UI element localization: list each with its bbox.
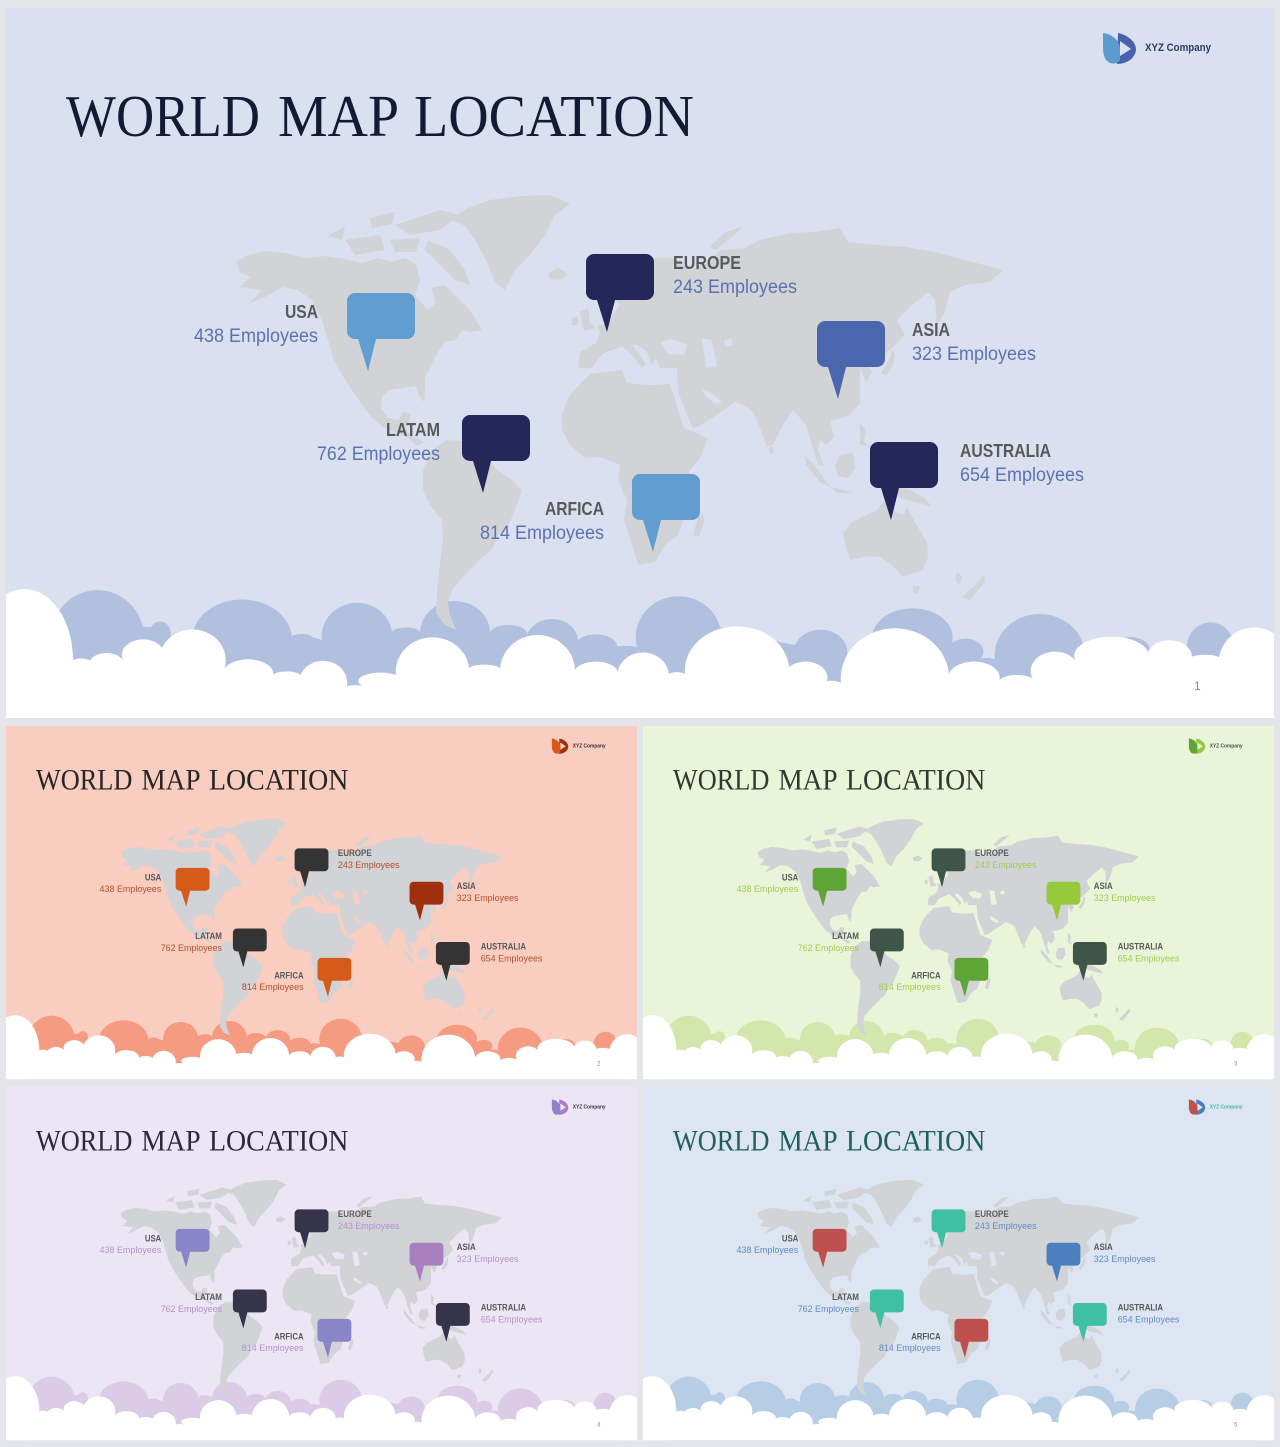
title: WORLD [36, 765, 132, 797]
callout: Asia: ASIA [457, 1242, 476, 1252]
logo [1189, 738, 1243, 754]
callout: Australia [436, 1302, 543, 1342]
logo [1103, 33, 1212, 64]
callout: Asia: 323 Employees [457, 1254, 519, 1265]
callout: Europe: 243 Employees [975, 860, 1037, 871]
callout: USA: USA [145, 1233, 162, 1243]
callout: Asia: 323 Employees [912, 344, 1036, 365]
panel: purple slide [0, 1087, 645, 1441]
back clouds [665, 1377, 1257, 1441]
callout: Europe: 243 Employees [338, 1221, 400, 1232]
page number: 5 [1234, 1422, 1238, 1428]
page number: 1 [1194, 679, 1201, 693]
callout: Asia: ASIA [457, 881, 476, 891]
front clouds [0, 1015, 645, 1080]
title: LOCATION [414, 83, 694, 149]
back clouds [665, 1016, 1257, 1080]
callout: Africa: 814 Employees [242, 982, 304, 993]
world map [236, 195, 1003, 630]
callout: Europe: 243 Employees [338, 860, 400, 871]
title: MAP [141, 1126, 201, 1158]
callout: Europe: EUROPE [673, 253, 741, 273]
title: LOCATION [846, 1126, 985, 1158]
logo: XYZ Company [1145, 42, 1212, 54]
callout: Latam: LATAM [195, 931, 222, 941]
front clouds [628, 1376, 1280, 1441]
callout: USA: 438 Employees [100, 884, 162, 895]
callout: Europe: EUROPE [975, 848, 1009, 858]
callout: Latam: 762 Employees [161, 1304, 222, 1315]
callout: Africa [879, 958, 988, 997]
callout: USA [737, 1229, 847, 1268]
title: LOCATION [209, 765, 348, 797]
callout: Asia: 323 Employees [1094, 893, 1156, 904]
callout: Africa: 814 Employees [242, 1343, 304, 1354]
callout: USA [100, 1229, 210, 1268]
slide background [6, 726, 637, 1079]
callout: Africa [879, 1319, 988, 1358]
title: LOCATION [846, 765, 985, 797]
callout: USA: 438 Employees [737, 1245, 799, 1256]
callout: Asia: ASIA [912, 320, 950, 340]
panel: pale blue slide [628, 1087, 1280, 1441]
world map [757, 1180, 1139, 1397]
callout: USA: 438 Employees [737, 884, 799, 895]
callout: USA: 438 Employees [100, 1245, 162, 1256]
callout: USA: USA [782, 872, 799, 882]
title: LOCATION [209, 1126, 348, 1158]
callout: Australia: AUSTRALIA [1118, 1302, 1163, 1312]
callout: Asia: 323 Employees [1094, 1254, 1156, 1265]
callout: Africa [242, 1319, 351, 1358]
callout: Australia: AUSTRALIA [1118, 941, 1163, 951]
callout: Europe: 243 Employees [673, 277, 797, 298]
callout: Africa: ARFICA [545, 499, 604, 519]
back clouds [28, 1016, 620, 1080]
callout: USA [194, 293, 415, 371]
front clouds [0, 589, 1280, 720]
callout: Australia: 654 Employees [1118, 1314, 1180, 1325]
callout: Latam: 762 Employees [798, 1304, 859, 1315]
callout: Latam: 762 Employees [317, 444, 440, 465]
panel: orange slide [0, 726, 645, 1080]
callout: Europe [586, 253, 797, 332]
callout: USA [737, 868, 847, 907]
callout: Africa: 814 Employees [480, 523, 604, 544]
callout: Europe: 243 Employees [975, 1221, 1037, 1232]
callout: Latam [798, 1290, 904, 1328]
page number: 2 [597, 1061, 601, 1067]
page number: 3 [1234, 1061, 1238, 1067]
back clouds [60, 590, 1232, 686]
callout: Asia [1047, 881, 1156, 921]
slide background [643, 1087, 1274, 1440]
callout: Africa: ARFICA [274, 970, 304, 980]
title: WORLD [673, 765, 769, 797]
world map [120, 1180, 502, 1397]
world map [120, 819, 502, 1036]
slide background [6, 8, 1274, 718]
callout: Africa [480, 474, 700, 552]
callout: Australia [1073, 941, 1180, 981]
front clouds [628, 1015, 1280, 1080]
logo [552, 738, 606, 754]
panel: main blue slide [0, 8, 1280, 720]
callout: Europe: EUROPE [338, 1209, 372, 1219]
callout: Europe [295, 848, 400, 887]
world map [757, 819, 1139, 1036]
callout: Africa: ARFICA [911, 1331, 941, 1341]
logo: XYZ Company [1210, 1104, 1243, 1110]
title: MAP [278, 83, 397, 149]
callout: USA: 438 Employees [194, 326, 318, 347]
title: MAP [778, 1126, 838, 1158]
callout: Latam: 762 Employees [161, 943, 222, 954]
callout: Latam: LATAM [832, 931, 859, 941]
callout: Australia: AUSTRALIA [481, 1302, 526, 1312]
callout: Europe [295, 1209, 400, 1248]
callout: Asia [817, 320, 1036, 399]
callout: Europe: EUROPE [975, 1209, 1009, 1219]
callout: Latam: LATAM [832, 1292, 859, 1302]
callout: Latam: LATAM [195, 1292, 222, 1302]
logo: XYZ Company [573, 1104, 606, 1110]
callout: Australia: 654 Employees [960, 465, 1084, 486]
callout: Latam [161, 929, 267, 967]
callout: Africa: 814 Employees [879, 1343, 941, 1354]
title: WORLD [673, 1126, 769, 1158]
callout: Latam [798, 929, 904, 967]
slide background [6, 1087, 637, 1440]
page number: 4 [597, 1422, 601, 1428]
callout: Africa: ARFICA [911, 970, 941, 980]
callout: Australia: AUSTRALIA [481, 941, 526, 951]
callout: Asia [410, 1242, 519, 1282]
callout: Asia: ASIA [1094, 881, 1113, 891]
callout: USA: USA [782, 1233, 799, 1243]
callout: USA [100, 868, 210, 907]
title: WORLD [66, 83, 260, 149]
callout: Asia [410, 881, 519, 921]
logo: XYZ Company [573, 743, 606, 749]
callout: USA: USA [285, 302, 318, 322]
callout: Australia: 654 Employees [481, 953, 543, 964]
callout: Europe: EUROPE [338, 848, 372, 858]
callout: Australia [436, 941, 543, 981]
title: MAP [141, 765, 201, 797]
callout: Latam: 762 Employees [798, 943, 859, 954]
callout: USA: USA [145, 872, 162, 882]
callout: Africa: ARFICA [274, 1331, 304, 1341]
title: MAP [778, 765, 838, 797]
callout: Latam [161, 1290, 267, 1328]
callout: Europe [932, 1209, 1037, 1248]
callout: Asia: ASIA [1094, 1242, 1113, 1252]
logo [1189, 1099, 1243, 1115]
callout: Latam: LATAM [386, 420, 440, 440]
callout: Australia: AUSTRALIA [960, 441, 1051, 461]
callout: Australia: 654 Employees [481, 1314, 543, 1325]
back clouds [28, 1377, 620, 1441]
callout: Africa [242, 958, 351, 997]
callout: Australia: 654 Employees [1118, 953, 1180, 964]
callout: Latam [317, 415, 530, 493]
logo [552, 1099, 606, 1115]
callout: Asia [1047, 1242, 1156, 1282]
callout: Europe [932, 848, 1037, 887]
front clouds [0, 1376, 645, 1441]
callout: Australia [1073, 1302, 1180, 1342]
callout: Australia [870, 441, 1084, 520]
callout: Asia: 323 Employees [457, 893, 519, 904]
slide background [643, 726, 1274, 1079]
callout: Africa: 814 Employees [879, 982, 941, 993]
logo: XYZ Company [1210, 743, 1243, 749]
panel: green slide [628, 726, 1280, 1080]
title: WORLD [36, 1126, 132, 1158]
